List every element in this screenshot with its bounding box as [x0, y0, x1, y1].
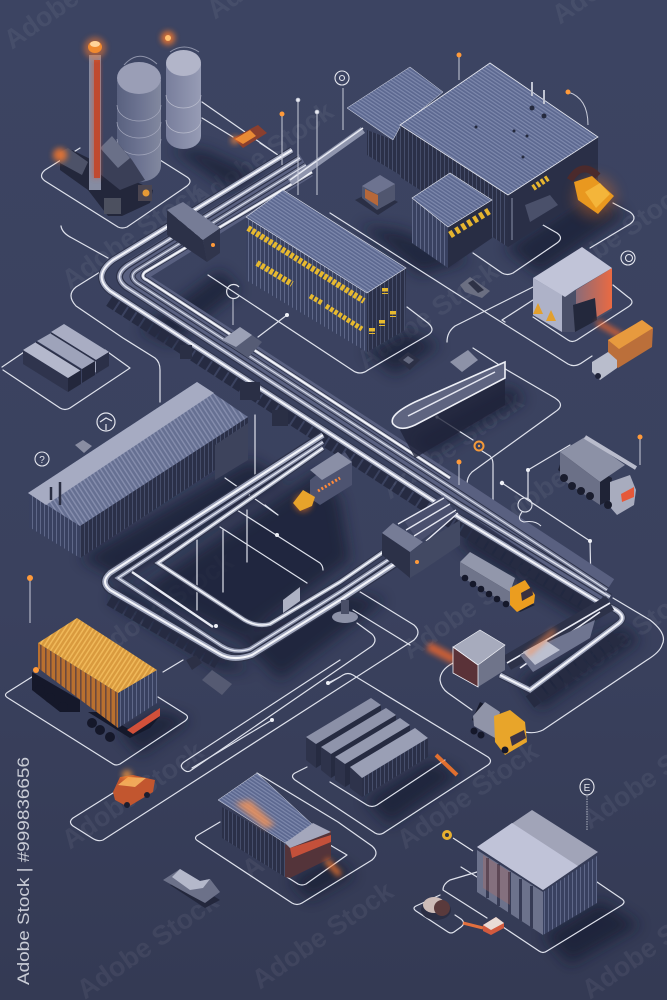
panel: long warehouse [28, 382, 248, 558]
glow: left machine [53, 148, 67, 162]
route dots [214, 313, 592, 722]
panel: stacked containers left [23, 324, 109, 392]
watermarks: Adobe Stock [396, 545, 549, 665]
watermarks: Adobe Stock [351, 255, 504, 375]
watermarks: Adobe Stock [56, 735, 209, 855]
icon: worker pin [518, 498, 541, 526]
icon: support bubble [621, 251, 635, 265]
orange box truck [592, 320, 653, 380]
row 1 [350, 728, 428, 797]
panel: main factory [347, 63, 615, 268]
watermarks: Adobe Stock [376, 385, 529, 505]
lamps and poles [30, 55, 640, 623]
icon: E pin [580, 779, 594, 830]
warning triangles [533, 303, 556, 321]
flare marker [161, 31, 175, 45]
silo 1 [117, 56, 161, 182]
storage rows [306, 698, 457, 797]
grey car [460, 277, 490, 298]
icon: orange spiral marker [474, 442, 484, 450]
orange container truck [32, 618, 160, 742]
red car [231, 125, 267, 148]
chimney [84, 37, 106, 190]
icon: question pin [35, 452, 49, 466]
dish machine [421, 897, 451, 920]
main pipeline [102, 150, 622, 690]
second pipeline loop [105, 435, 458, 658]
icon: question pin: ? [39, 455, 45, 466]
center machine on pipeline [180, 327, 288, 426]
factory roof [400, 63, 598, 195]
icon: location pin near annex [335, 71, 349, 85]
orange truck at dock [570, 169, 615, 217]
valve on loop [332, 600, 358, 623]
small dark car [398, 352, 420, 370]
barn [218, 773, 340, 878]
annex [347, 67, 443, 175]
machinery base [60, 136, 153, 216]
return conveyor [507, 603, 610, 672]
beam [436, 755, 457, 775]
panel: conveyor loop [392, 350, 505, 458]
ground shadows [80, 148, 640, 965]
stock id label: Adobe Stock | #999836656 [15, 757, 33, 985]
yellow tanker truck [470, 702, 527, 755]
watermarks: Adobe [236, 812, 322, 885]
glowing block [428, 630, 505, 687]
window bands [248, 228, 393, 334]
center tanker with orange cab [293, 452, 352, 512]
lamp glows [27, 52, 642, 581]
crate with beam [463, 917, 504, 935]
icon: E pin: E [584, 783, 591, 794]
panel: white shed [533, 247, 612, 332]
pipe to annex [290, 128, 363, 182]
watermarks: Adobe Stock [56, 175, 209, 295]
icon: orange lock marker [442, 830, 473, 851]
row 3 [321, 708, 396, 778]
panel: silos and chimney [53, 37, 201, 216]
row 2 [335, 718, 410, 787]
watermarks: Adobe Stock [86, 545, 239, 665]
watermarks: Adobe Stock [246, 875, 399, 995]
small wing [412, 173, 492, 268]
tanker truck center [460, 552, 535, 612]
tanker truck upper right [558, 437, 636, 515]
main pipeline supports [110, 300, 618, 702]
grey warehouse bottom right [477, 810, 598, 935]
gate 2 [382, 520, 460, 578]
roof vents [474, 82, 546, 158]
small orange truck [113, 770, 155, 808]
small cart [75, 440, 92, 453]
row 4 [306, 698, 381, 768]
icon: truck pin [97, 413, 115, 431]
small hut [355, 175, 398, 215]
watermarks: Adobe Stock [391, 735, 544, 855]
panel: middle building [246, 190, 406, 352]
flatbed vehicle [163, 869, 220, 908]
watermarks: Adobe [486, 462, 572, 535]
factory walls [400, 125, 598, 247]
icon: chain pin on middle plot [227, 284, 239, 299]
silo 2 [166, 47, 201, 149]
gate 1 [167, 202, 220, 262]
small carts below loop [186, 655, 232, 695]
watermarks: Adobe Stock [186, 95, 339, 215]
